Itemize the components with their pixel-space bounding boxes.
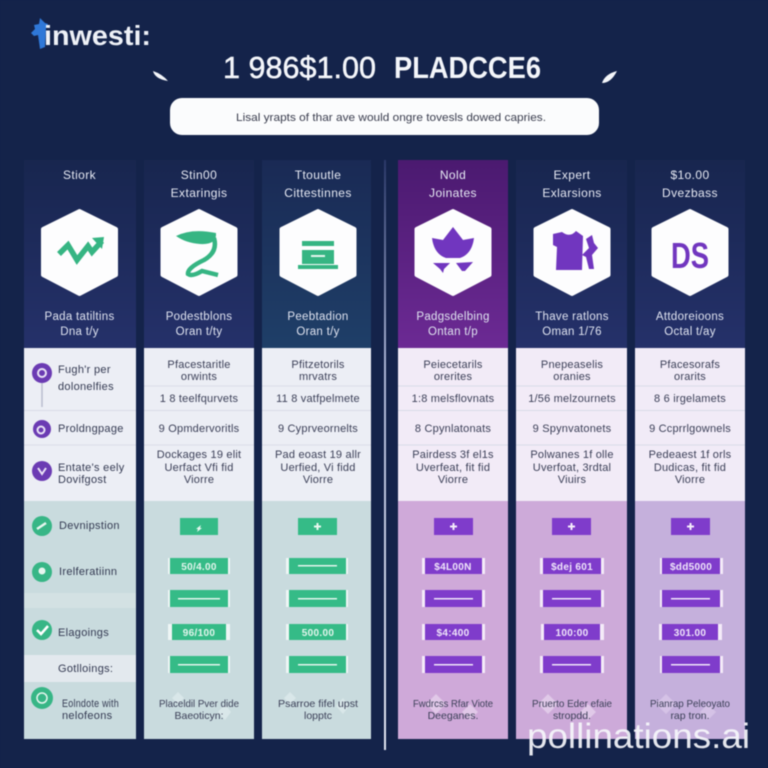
heading: [542, 168, 602, 200]
price bar: $4L00N: [434, 562, 472, 573]
table text: Viorre: [438, 474, 468, 486]
footer text: stropdd.: [553, 710, 591, 722]
table text: 9 Opmdervoritls: [159, 423, 240, 435]
footer text: [159, 692, 239, 722]
row label: prolongpage: Proldngpage: [58, 423, 124, 435]
add button: [434, 518, 473, 535]
table text: Pfacestaritle: [167, 359, 231, 371]
table text: Pad eoast 19 allr: [275, 449, 361, 461]
price bar: [541, 624, 604, 640]
row label: irelferation: [32, 562, 117, 582]
title: [223, 50, 541, 85]
row label: eolndote with nelofeons: [31, 687, 119, 722]
price bar: [540, 558, 604, 574]
row label: engagings: [32, 620, 109, 640]
row label: estate's only: [32, 461, 125, 486]
caption: [416, 311, 490, 338]
footer text: lopptc: [304, 710, 332, 722]
row label: description: Devnipstion: [59, 520, 120, 532]
table text: Dudicas, fit fid: [654, 462, 726, 474]
caption: stock: [44, 311, 115, 338]
heading: Exlarsions: [542, 186, 602, 200]
dash bar: [168, 656, 230, 673]
price bar: 96/100: [183, 628, 215, 639]
price bar: [659, 624, 722, 640]
table text: Uverfoat, 3rdtal: [533, 462, 611, 474]
table text: Viuirs: [558, 474, 587, 486]
caption: Oran t/y: [296, 326, 340, 338]
icon: DS hexagon: DS: [671, 235, 709, 276]
price bar: [286, 624, 348, 640]
heading: stock: Stiork: [63, 168, 97, 182]
add button: [298, 518, 337, 535]
table text: Pedeaest 1f orls: [649, 449, 732, 461]
row label: sign per deliverables: dolonelfies: [58, 381, 114, 393]
table text: [528, 359, 616, 486]
table text: orerites: [434, 371, 472, 383]
dash bar: [540, 590, 604, 607]
table text: [157, 359, 241, 486]
table text: Polwanes 1f olle: [530, 449, 614, 461]
row label: eolndote with nelofeons: nelofeons: [62, 710, 113, 722]
panel: column 5: [516, 160, 627, 739]
panel: column 6: [635, 160, 745, 739]
table text: [412, 359, 495, 486]
table text: 8 Cpynlatonats: [415, 423, 491, 435]
dash bar: [286, 558, 348, 574]
panel: features column: [24, 160, 136, 739]
panel: column 4: [398, 160, 508, 739]
footer text: Fwdrcss Rfar Viote: [413, 698, 493, 710]
row label: engagings: Elagoings: [58, 627, 109, 639]
caption: [166, 311, 232, 338]
dash bar: [422, 590, 485, 607]
caption: Thave ratlons: [535, 311, 609, 323]
footer text: Placeldil Pver dide: [159, 698, 239, 710]
icon: chart hexagon: [43, 211, 116, 294]
caption: Octal t/ay: [664, 326, 716, 338]
table text: orwints: [181, 371, 217, 383]
panel: column 3: [262, 160, 371, 739]
row label: prolongpage: [33, 420, 124, 438]
table text: Viorre: [675, 474, 705, 486]
table text: 11 8 vatfpelmete: [276, 393, 360, 405]
table text: mrvatrs: [299, 371, 337, 383]
logo: inwesti:: [44, 20, 151, 51]
row label: sign per deliverables: Fugh'r per: [58, 364, 111, 376]
table text: 1 8 teelfqurvets: [160, 393, 239, 405]
heading: [171, 168, 227, 200]
heading: [429, 168, 477, 200]
price bar: 301.00: [674, 628, 706, 639]
dash bar: [286, 590, 348, 607]
watermark: pollinations.ai: [527, 717, 750, 756]
price bar: [168, 558, 230, 574]
caption: Oman 1/76: [542, 326, 602, 338]
price bar: [422, 624, 485, 640]
caption: [287, 311, 349, 338]
table text: Uerfact Vfi fid: [164, 462, 234, 474]
caption: Podestblons: [166, 311, 232, 323]
table text: 1/56 melzournets: [528, 393, 616, 405]
table text: [275, 359, 361, 486]
caption: stock: Dna t/y: [60, 326, 99, 338]
icon: laptop hexagon: [282, 211, 354, 294]
table text: Peiecetarils: [423, 359, 483, 371]
footer text: [413, 694, 493, 722]
table text: 8 6 irgelamets: [654, 393, 726, 405]
table text: oranies: [553, 371, 591, 383]
dash bar: [660, 656, 723, 673]
row label: estate's only: Entate's eely: [58, 462, 125, 474]
price bar: [168, 624, 230, 640]
add button: [552, 518, 591, 535]
icon: shirt hexagon: [536, 211, 608, 294]
footer text: Pruerto Eder efaie: [532, 698, 612, 710]
caption: [535, 311, 609, 338]
row label: gotlloings: Gotlloings:: [58, 663, 113, 675]
heading: $1o.00: [670, 168, 710, 182]
table text: 9 Ccprrlgownels: [649, 423, 731, 435]
footer text: [650, 694, 730, 722]
add button: [180, 518, 218, 535]
table text: Pfitzetorils: [291, 359, 345, 371]
price bar: [660, 558, 723, 574]
footer text: [278, 692, 358, 722]
price bar: 50/4.00: [181, 562, 217, 573]
price bar: 100:00: [556, 628, 589, 639]
table text: Viorre: [303, 474, 333, 486]
footer text: rap tron.: [670, 710, 710, 722]
price bar: $dej 601: [551, 562, 593, 573]
heading: Nold: [440, 168, 466, 182]
caption: Ontan t/p: [428, 326, 478, 338]
caption: Attdoreioons: [656, 311, 724, 323]
heading: Cittestinnes: [284, 186, 352, 200]
title: 1 986$1.00: [223, 50, 376, 85]
price bar: [422, 558, 485, 574]
table text: Pairdess 3f el1s: [412, 449, 494, 461]
footer text: Psarroe fifel upst: [278, 698, 358, 710]
price bar: $dd5000: [670, 562, 712, 573]
table text: orarits: [674, 371, 706, 383]
heading: Joinates: [429, 186, 477, 200]
central divider: [384, 160, 386, 750]
table text: 9 Spynvatonets: [533, 423, 612, 435]
icon: lotus hexagon: [416, 211, 490, 294]
dash bar: [540, 656, 604, 673]
table text: 1:8 melsflovnats: [412, 393, 495, 405]
price bar: $4:400: [437, 628, 470, 639]
subtitle pill: Lisal yrapts of thar ave would ongre tovesls dowed capries.: [236, 112, 546, 124]
add button: [671, 518, 710, 535]
dash bar: [168, 590, 230, 607]
row label: eolndote with nelofeons: Eolndote with: [62, 698, 119, 710]
heading: Ttouutle: [295, 168, 341, 182]
caption: Oran t/ty: [176, 326, 222, 338]
icon: DS hexagon: [654, 211, 726, 294]
heading: [662, 168, 718, 200]
heading: Stin00: [181, 168, 217, 182]
table text: 9 Cyprveornelts: [278, 423, 358, 435]
title: PLADCCE6: [394, 50, 541, 85]
heading: Dvezbass: [662, 186, 718, 200]
heading: [284, 168, 352, 200]
row label: sign per deliverables: [32, 363, 114, 407]
heading: Expert: [553, 168, 591, 182]
footer text: [532, 694, 612, 722]
footer text: Pianrap Peleoyato: [650, 698, 730, 710]
icon: left leaf accent: [153, 71, 168, 81]
price bar: 500.00: [302, 628, 334, 639]
panel: column 2: [144, 160, 254, 739]
table text: Pnepeaselis: [541, 359, 603, 371]
caption: Peebtadion: [287, 311, 349, 323]
footer text: Baeoticyn:: [174, 710, 224, 722]
footer text: Deeganes.: [428, 710, 478, 722]
subtitle pill: [170, 98, 599, 135]
row label: irelferation: Irelferatiinn: [59, 566, 117, 578]
table text: [649, 359, 732, 486]
row label: description: [32, 516, 120, 536]
icon: leaf hexagon: [162, 211, 236, 294]
caption: [656, 311, 724, 338]
heading: Extaringis: [171, 186, 227, 200]
table text: Viorre: [184, 474, 214, 486]
caption: Padgsdelbing: [416, 311, 490, 323]
table text: Uverfeat, fit fid: [416, 462, 490, 474]
caption: stock: Pada tatiltins: [44, 311, 115, 323]
table text: Pfacesorafs: [660, 359, 720, 371]
dash bar: [660, 590, 723, 607]
row label: estate's only: Dovifgost: [58, 474, 107, 486]
table text: Dockages 19 elit: [157, 449, 241, 461]
dash bar: [286, 656, 348, 673]
table text: Uerfied, Vi fidd: [280, 462, 356, 474]
icon: right leaf accent: [602, 71, 617, 83]
dash bar: [422, 656, 485, 673]
